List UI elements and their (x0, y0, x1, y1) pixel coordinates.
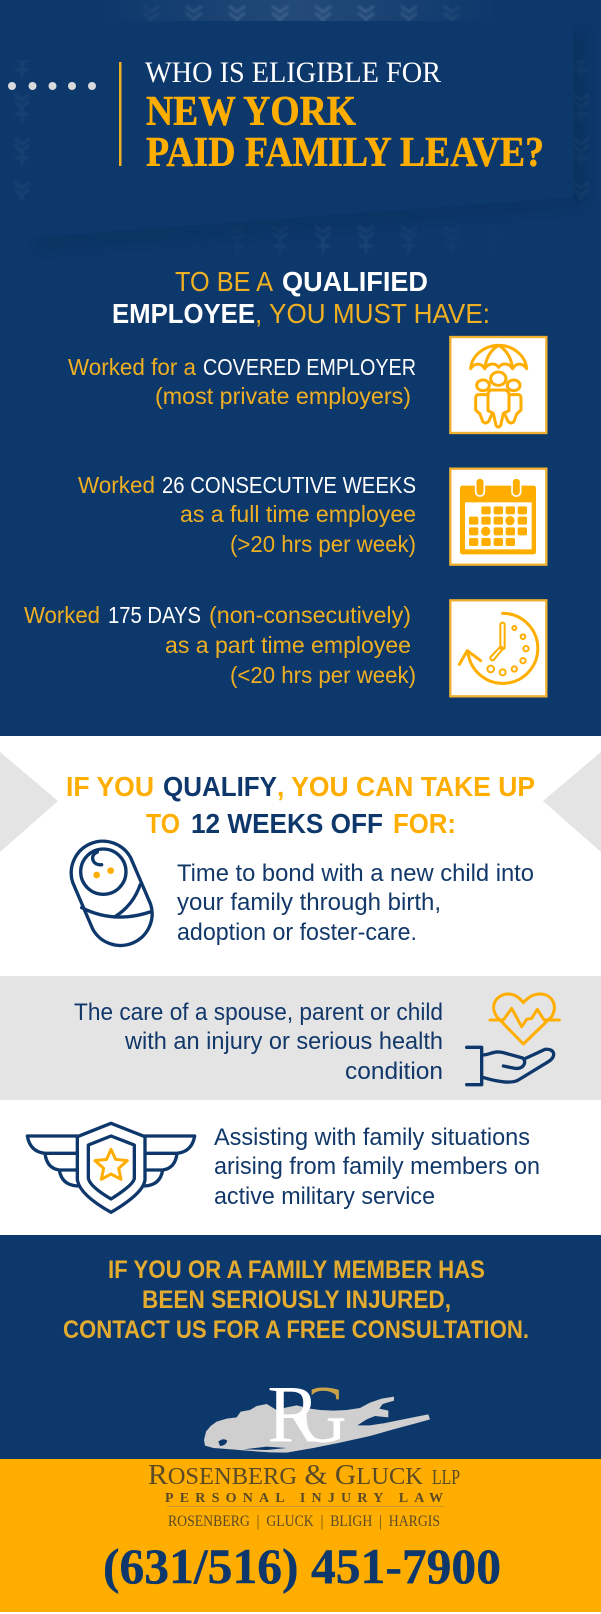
text block: care of a spouse (74, 999, 443, 1085)
text block: bond with child (177, 860, 534, 946)
right grey triangle (543, 752, 601, 852)
icon: long island logo: G (297, 1369, 347, 1460)
icon: long island logo: G (297, 1369, 347, 1460)
panel: header background (0, 0, 601, 736)
text block: firm name: PERSONAL INJURY LAW (165, 1491, 443, 1506)
text block: firm name (148, 1459, 460, 1530)
icon: swaddled baby (71, 841, 152, 945)
icon: shield with wings and star (27, 1123, 195, 1212)
panel: contact band (0, 1235, 601, 1459)
title divider bar (119, 62, 122, 166)
icon: calendar (450, 469, 546, 565)
text block: contact call to action: BEEN SERIOUSLY INJURED, (142, 1286, 451, 1314)
text block: contact call to action (63, 1256, 529, 1344)
icon: heart over hand (467, 994, 559, 1085)
left grey triangle (0, 752, 58, 852)
text block: contact call to action: CONTACT US FOR A FREE CONSULTATION. (63, 1316, 529, 1344)
text block: phone number: (631/516) 451-7900 (103, 1538, 501, 1594)
heading: qualified employee: QUALIFIED (282, 266, 428, 297)
heading: if you qualify: QUALIFY (163, 771, 277, 802)
heading: qualified employee: , YOU MUST HAVE: (255, 298, 490, 329)
heading: if you qualify (66, 771, 535, 839)
text block: contact call to action: IF YOU OR A FAMILY MEMBER HAS (108, 1256, 485, 1284)
heading: qualified employee: EMPLOYEE (112, 298, 255, 329)
heading: if you qualify: , YOU CAN TAKE UP (277, 771, 535, 802)
title line: paid family leave: PAID FAMILY LEAVE? (146, 130, 544, 176)
text block: military service (214, 1124, 540, 1210)
text block: covered employer: COVERED EMPLOYER (203, 354, 416, 380)
icon: long island logo: R (267, 1369, 321, 1460)
title line: who is eligible: WHO IS ELIGIBLE FOR (145, 56, 441, 89)
text block: covered employer: (most private employers) (155, 383, 411, 409)
text block: consecutive weeks: 26 CONSECUTIVE WEEKS (162, 472, 416, 498)
text block: firm name: ROSENBERG | GLUCK | BLIGH | HARGIS (168, 1513, 440, 1530)
text block: bond with child: Time to bond with a new child into (177, 860, 534, 887)
text block: consecutive weeks: Worked (78, 472, 155, 498)
text block: bond with child: adoption or foster-care. (177, 919, 417, 946)
text block: 175 days: 175 DAYS (108, 602, 201, 628)
text block: consecutive weeks: as a full time employee (180, 501, 416, 527)
icon: long island logo (204, 1388, 430, 1453)
text block: military service: active military service (214, 1183, 435, 1210)
text block: bond with child: your family through birth, (177, 889, 441, 916)
heading: qualified employee: TO BE A (175, 266, 273, 297)
heading: if you qualify: TO (146, 808, 180, 839)
text block: firm name: ROSENBERG & GLUCK (148, 1459, 424, 1491)
text block: covered employer: Worked for a (68, 354, 196, 380)
panel: care band (0, 976, 601, 1100)
text block: 175 days: Worked (24, 602, 100, 628)
icon: umbrella over family (450, 337, 546, 433)
heading: qualified employee (112, 266, 490, 329)
heading: if you qualify: FOR: (393, 808, 456, 839)
text block: 175 days: as a part time employee (165, 632, 411, 658)
text block: care of a spouse: with an injury or serious health (124, 1028, 443, 1055)
title (8, 56, 544, 176)
panel: footer gold band (0, 1459, 601, 1612)
text block: consecutive weeks: (>20 hrs per week) (230, 531, 416, 557)
text block: firm name: LLP (432, 1465, 460, 1489)
heading: if you qualify: IF YOU (66, 771, 154, 802)
text block: care of a spouse: condition (345, 1058, 443, 1085)
text block: consecutive weeks (78, 472, 416, 557)
text block: 175 days: (<20 hrs per week) (230, 662, 416, 688)
text block: 175 days: (non-consecutively) (209, 602, 411, 628)
heading: if you qualify: 12 WEEKS OFF (191, 808, 383, 839)
icon: clock with arrow (450, 600, 546, 696)
panel: what you can take off for (0, 736, 601, 976)
text block: 175 days (24, 602, 416, 688)
title line: new york: NEW YORK (146, 89, 356, 135)
text block: care of a spouse: The care of a spouse, parent or child (74, 999, 443, 1026)
text block: military service: Assisting with family situations (214, 1124, 530, 1151)
icon: five dots (8, 82, 96, 90)
text block: covered employer (68, 354, 416, 409)
text block: military service: arising from family members on (214, 1153, 540, 1180)
